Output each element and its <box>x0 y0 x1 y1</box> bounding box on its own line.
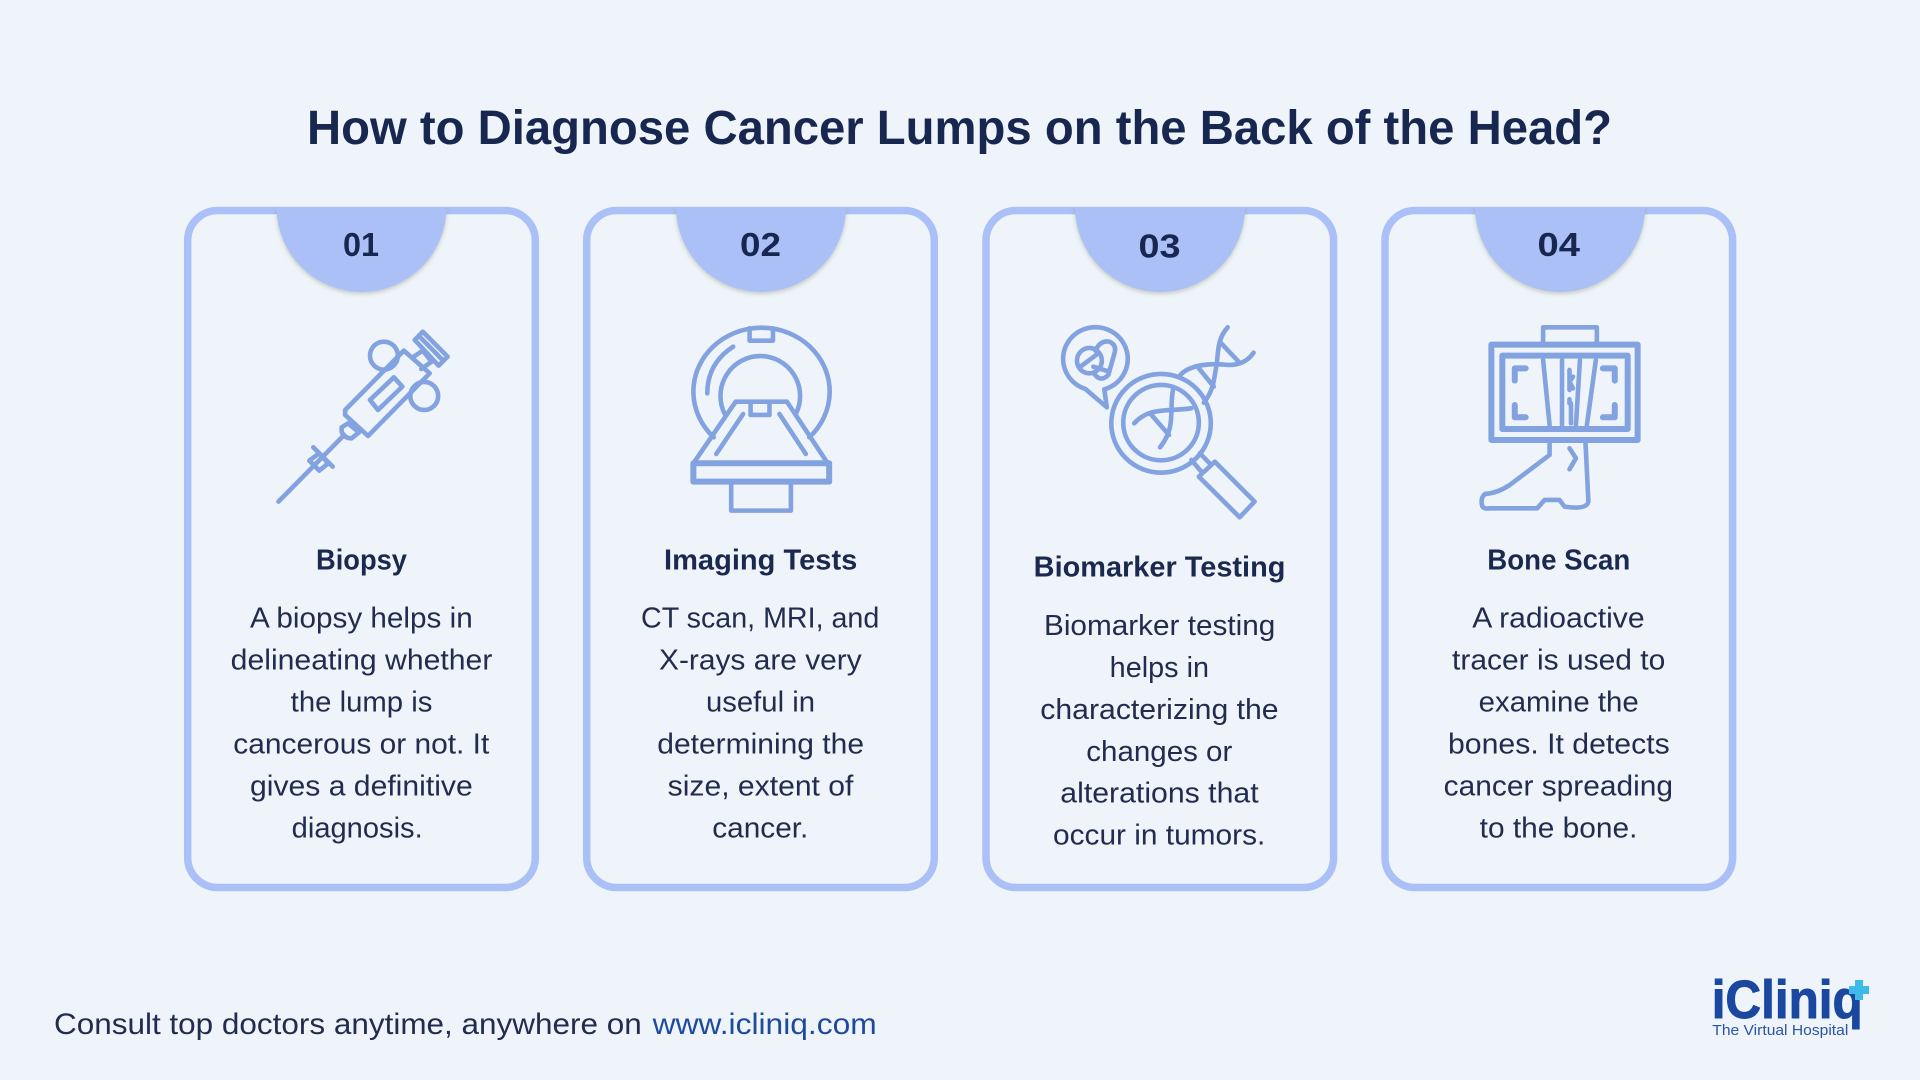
text: Bone Scan description: A radioactive <box>1472 603 1645 635</box>
footer text: Consult top doctors anytime, anywhere on <box>54 1008 642 1041</box>
icon: CT scanner <box>693 328 830 511</box>
footer text <box>54 1008 877 1041</box>
text: Imaging Tests description: size, extent of <box>668 771 853 803</box>
text: Biopsy description: delineating whether <box>231 644 493 676</box>
heading: Imaging Tests: Imaging Tests <box>664 544 857 576</box>
panel: 01 Biopsy <box>188 207 535 888</box>
number 01: 01 <box>343 226 379 263</box>
text: Biopsy description: cancerous or not. It <box>233 728 489 760</box>
text: Bone Scan description: bones. It detects <box>1448 728 1670 760</box>
heading: Biopsy: Biopsy <box>316 544 407 576</box>
text: Imaging Tests description: CT scan, MRI, and <box>641 603 879 635</box>
number tab 01 <box>276 207 446 292</box>
text: Biomarker Testing description: changes or <box>1086 736 1233 768</box>
number 04: 04 <box>1538 226 1581 263</box>
icon: syringe <box>278 332 448 502</box>
text: Biomarker Testing description <box>1040 610 1279 852</box>
text: Biopsy description <box>231 603 493 844</box>
heading: Biomarker Testing: Biomarker Testing <box>1034 552 1285 584</box>
footer link: www.icliniq.com <box>652 1008 877 1041</box>
number 03: 03 <box>1138 228 1180 264</box>
panel: 03 Biomarker Testing <box>986 207 1334 888</box>
text: Biomarker Testing description: helps in <box>1110 652 1209 684</box>
text: Bone Scan description: examine the <box>1479 687 1639 719</box>
panel: 02 Imaging Tests <box>587 207 934 888</box>
text: Biomarker Testing description: characterizing the <box>1040 694 1279 726</box>
logo tagline: The Virtual Hospital <box>1712 1022 1848 1039</box>
heading: Bone Scan: Bone Scan <box>1487 544 1630 576</box>
icon: bone scan of leg <box>1482 327 1638 509</box>
text: Bone Scan description <box>1444 603 1673 844</box>
logo plus <box>1849 980 1869 1000</box>
text: Biopsy description: the lump is <box>291 687 432 719</box>
panel: 04 Bone Scan <box>1385 207 1733 888</box>
text: Imaging Tests description <box>641 603 879 844</box>
text: Bone Scan description: cancer spreading <box>1444 771 1673 803</box>
text: Biopsy description: diagnosis. <box>292 812 423 844</box>
number tab 04 <box>1475 207 1645 292</box>
number 02: 02 <box>740 226 781 263</box>
title: How to Diagnose Cancer Lumps on the Back of the Head? <box>307 102 1612 155</box>
text: Imaging Tests description: useful in <box>706 687 815 719</box>
text: Bone Scan description: tracer is used to <box>1452 644 1665 676</box>
text: Biomarker Testing description: alterations that <box>1060 778 1259 810</box>
text: Biomarker Testing description: Biomarker testing <box>1044 610 1275 642</box>
icon: magnifier with DNA and pills <box>1063 327 1255 517</box>
text: Imaging Tests description: cancer. <box>712 812 808 844</box>
text: Biopsy description: gives a definitive <box>250 771 473 803</box>
number tab 02 <box>676 207 846 292</box>
text: Biopsy description: A biopsy helps in <box>250 603 473 635</box>
logo: iCliniq: iCliniq <box>1712 970 1863 1030</box>
text: Imaging Tests description: determining the <box>657 728 864 760</box>
text: Imaging Tests description: X-rays are very <box>659 644 862 676</box>
text: Bone Scan description: to the bone. <box>1480 812 1637 844</box>
number tab 03 <box>1075 207 1245 292</box>
text: Biomarker Testing description: occur in tumors. <box>1053 820 1265 852</box>
